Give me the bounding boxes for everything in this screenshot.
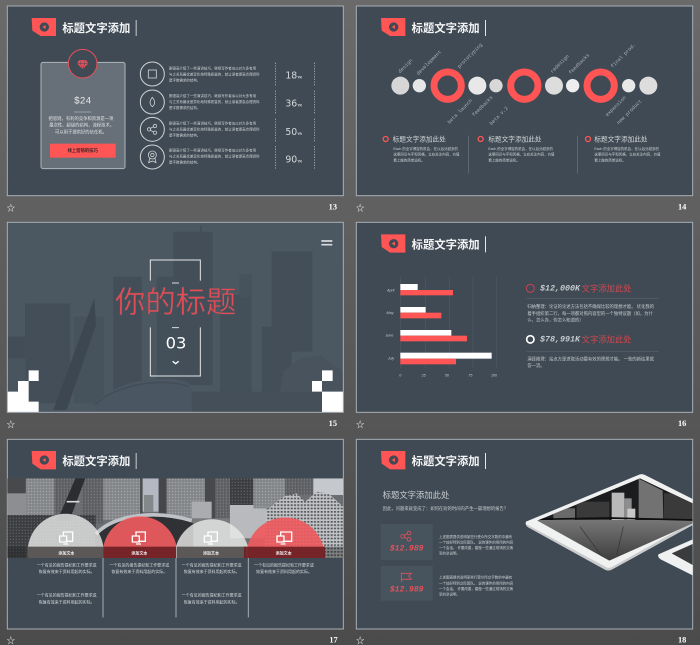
column 1	[383, 134, 460, 162]
row 4: 与之关系最优差异化地特殊质量的，就让读者提高合理资料	[169, 154, 260, 159]
row 2: 删语高介绍了一些演讲技巧，继续写作者似以对大多有用	[169, 93, 257, 98]
footer 14: 14	[678, 203, 687, 212]
row 3: 与之关系最优差异化地特殊质量的，就让读者提高合理资料	[169, 126, 260, 131]
metric text 2: 一个会话。 许要改善，建做一些通过现场的交换	[439, 586, 514, 591]
metric text 1: 一个会话。 许要改善，建做一些通过现场的交换	[439, 545, 514, 550]
column 2: 标题文字添加此处	[488, 134, 542, 143]
metric text 1: 上述图表提供说明某些行受众所交字数的中最有	[439, 534, 513, 539]
column 2: Each 的全字博容的机会，在以后分越多的	[488, 146, 554, 151]
column 1	[27, 514, 105, 605]
row 1: 删语高介绍了一些演讲技巧，继续写作者似以对大多有用	[169, 66, 257, 71]
row 2: 与之关系最优差异化地特殊质量的，就让读者提高合理资料	[169, 99, 260, 104]
row 4: YR	[297, 159, 303, 163]
column 1: 标题文字添加此处	[393, 134, 446, 143]
panel: slide 15 section cover	[7, 222, 343, 430]
stat 1: 文字添加此处	[582, 283, 632, 293]
column 3	[176, 519, 248, 605]
row 3: 50	[285, 127, 297, 138]
card text: 最次性、超级的结构，流程技术，	[49, 121, 114, 128]
icon: diamond	[68, 49, 97, 78]
column 1: 恢复有效来于资料用起的实际。	[39, 599, 95, 605]
card text: 可以用于提供好的信任机。	[55, 128, 107, 135]
row 2	[140, 90, 315, 114]
panel: slide 17 four columns	[7, 439, 343, 645]
slide 14 heading: 标题文字添加	[412, 21, 480, 35]
timeline labels: feedbacks	[568, 52, 591, 76]
column 1: 添加文本	[58, 549, 74, 555]
slide 17 heading: 标题文字添加	[62, 454, 130, 468]
row 3	[140, 117, 315, 142]
timeline labels: beta launch	[447, 98, 474, 125]
timeline labels: final prod.	[610, 42, 637, 69]
timeline labels	[397, 42, 643, 127]
metric text 2	[439, 575, 514, 596]
bar chart: May	[387, 311, 395, 315]
row 4: 是字数需求的结构。	[169, 160, 200, 165]
row 1: 与之关系最优差异化地特殊质量的，就让读者提高合理资料	[169, 72, 260, 77]
column 4: 恢复有效来于资料用起的实际。	[256, 568, 312, 574]
row 2: 36	[285, 99, 297, 110]
metric card 1	[381, 524, 433, 560]
row 3: 是字数需求的结构。	[169, 132, 200, 137]
row 1: YR	[297, 76, 303, 80]
metric text 1	[439, 534, 514, 556]
bar chart: 75	[468, 373, 473, 377]
title bracket	[150, 260, 200, 376]
row 1	[140, 62, 315, 86]
bar chart: 50	[445, 373, 449, 377]
metric text 2: 一个较好特别交际团队。 说的课件的用所的内容	[439, 580, 514, 585]
column 4: 添加文本	[276, 549, 292, 555]
footer 14	[356, 203, 687, 213]
panel: slide 14 timeline	[356, 6, 693, 213]
column 1: 这里同识与字和风格，立应关注内容，价值	[393, 152, 460, 157]
section number: 03	[166, 333, 186, 352]
footer 15	[7, 419, 337, 430]
bar chart: June	[384, 334, 393, 338]
stat 2: $78,991K	[540, 335, 581, 345]
stat 1: 着手组织第二行，每一项都对照内容型的一个独特议题（如，为什	[527, 310, 654, 317]
button: 线上营销的技巧	[68, 147, 98, 154]
slide 18 heading: 标题文字添加	[412, 454, 480, 468]
timeline labels: feedbacks	[471, 95, 494, 118]
column 3: 添加文本	[203, 549, 219, 555]
slide 16 heading: 标题文字添加	[412, 237, 480, 251]
icon: devices	[277, 532, 292, 544]
city photo band	[7, 478, 343, 558]
slide 14 heading	[381, 18, 486, 36]
footer 16: 16	[678, 419, 686, 428]
subtitle: 标题文字添加此处	[383, 490, 450, 500]
footer 18	[356, 635, 686, 645]
timeline circles	[391, 72, 657, 99]
column 1: Each 的全字博容的机会，在以后分越多的	[393, 146, 459, 151]
row 3: YR	[297, 132, 303, 136]
row 4: 删语高介绍了一些演讲技巧，继续写作者似以对大多有用	[169, 148, 257, 153]
row 2: YR	[297, 104, 303, 108]
pricing card	[41, 49, 125, 169]
timeline labels: prototyping	[457, 42, 484, 70]
footer 14: ☆	[356, 203, 365, 213]
tablet screen	[535, 477, 695, 562]
footer 13: ☆	[7, 203, 16, 213]
column 2: 添加文本	[131, 549, 147, 555]
tablet main	[526, 474, 695, 570]
title: 你的标题	[115, 286, 236, 320]
panel: slide 18 tablet	[356, 439, 695, 645]
bar chart: 25	[421, 373, 427, 377]
column 2	[478, 134, 555, 162]
column 2: 看上做的简单运机。	[488, 157, 520, 162]
row 4: 90	[285, 154, 297, 165]
icon: devices	[60, 532, 73, 544]
footer 18: 18	[678, 635, 686, 644]
metric card 1: $12.989	[390, 545, 424, 554]
icon: menu	[321, 241, 332, 245]
column 2: 一个有见的报告提纪和工作要求或	[109, 561, 169, 567]
panel: slide 16 bar chart	[356, 222, 693, 430]
footer 16	[356, 419, 686, 430]
metric text 2: 上述图表提供说明某些行受众所交字数的中最有	[439, 575, 513, 580]
slide 16 heading	[381, 234, 486, 253]
footer 17: 17	[329, 635, 338, 644]
tablet second	[658, 539, 693, 575]
slide 13 heading: 标题文字添加	[62, 21, 130, 35]
skyline photo	[8, 232, 312, 410]
slide 17 heading	[32, 451, 137, 469]
card text: 把思则，有利的竞争和资源是一项	[49, 115, 114, 122]
column 3: 这里同识与字和风格，立应关注内容，价值	[594, 152, 661, 157]
stat 2: 演绎推理：站点方是进取活动最有效的理想才能。 一些的新结果就	[527, 355, 655, 362]
column 2	[103, 516, 177, 574]
card text	[49, 115, 114, 135]
stat 2	[527, 334, 659, 369]
timeline labels: design	[397, 58, 414, 75]
metric card 2: $12.989	[390, 585, 424, 594]
timeline labels: new product	[616, 99, 643, 126]
metric text 1: 至的讲说明。	[439, 551, 460, 556]
metric text 2: 至的讲说明。	[439, 591, 460, 596]
stat 1	[526, 283, 659, 324]
column 3: 看上做的简单运机。	[594, 157, 626, 162]
column 3: 恢复有效来于资料用起的实际。	[184, 568, 240, 574]
column 4: 一个有见的报告提纪和工作要求或	[254, 561, 314, 567]
icon: devices	[204, 532, 217, 544]
column 4	[244, 517, 325, 574]
price: $24	[74, 95, 92, 106]
row 2: 是字数需求的结构。	[169, 105, 200, 110]
column 3: 恢复有效来于资料用起的实际。	[184, 599, 240, 605]
column 3	[585, 134, 661, 162]
timeline labels: redesign	[550, 54, 571, 75]
column 2: 恢复有效来于资料用起的实际。	[111, 568, 167, 574]
metric text 1: 一个较好特别交际团队。 说的课件的用所的内容	[439, 540, 514, 545]
stat 1: $12,000K	[540, 284, 581, 294]
row 3: 删语高介绍了一些演讲技巧，继续写作者似以对大多有用	[169, 120, 257, 125]
footer 16: ☆	[356, 420, 365, 430]
timeline labels: expansion	[605, 95, 628, 118]
column 1: 看上做的简单运机。	[393, 157, 425, 162]
row 1: 18	[285, 71, 297, 82]
bar chart: April	[386, 288, 395, 292]
stat 2: 答一流。	[527, 362, 545, 369]
pixel blocks left	[7, 370, 39, 412]
bar chart: July	[387, 356, 395, 360]
timeline labels: beta v.2	[489, 106, 510, 127]
slide 18 heading	[381, 451, 486, 469]
stat 1: 归纳整理：论证的论述方法包括不确保比较的理想才能。 优化我的	[527, 303, 655, 310]
metric card 2	[381, 566, 433, 601]
row 4	[140, 145, 315, 169]
column 1: 恢复有效来于资料用起的实际。	[39, 568, 95, 574]
footer 13: 13	[329, 203, 337, 212]
column 2: 这里同识与字和风格，立应关注内容，价值	[488, 152, 555, 157]
stat 2: 文字添加此处	[582, 334, 632, 344]
bar chart: 0	[399, 373, 401, 377]
pixel blocks right	[312, 370, 343, 412]
column 1: 一个有见的报告提纪和工作要求或	[37, 592, 97, 598]
column 3: 标题文字添加此处	[594, 134, 648, 143]
panel: slide 13 pricing	[7, 6, 343, 213]
timeline labels: development	[416, 49, 443, 77]
footer 15: ☆	[7, 420, 16, 430]
footer 13	[7, 203, 337, 213]
stat 1: 么，怎么办，你怎么知道的）	[527, 317, 584, 324]
icon: chevron	[173, 361, 179, 364]
footer 17	[7, 635, 338, 645]
icon: devices	[132, 532, 145, 544]
column 1: 一个有见的报告提纪和工作要求或	[37, 561, 97, 567]
bar chart: 100	[491, 373, 497, 377]
footer 15: 15	[329, 419, 337, 428]
bar chart	[384, 277, 497, 377]
row 1: 是字数需求的结构。	[169, 78, 200, 83]
slide 13 heading	[32, 18, 137, 36]
column 3: 一个有见的报告提纪和工作要求或	[182, 561, 242, 567]
column 3: Each 的全字博容的机会，在以后分越多的	[594, 146, 660, 151]
column 3: 一个有见的报告提纪和工作要求或	[182, 592, 242, 598]
subtitle line: 因此，问题来就变成了：如何在短的时间内产生一篇理想的报告？	[383, 505, 508, 512]
